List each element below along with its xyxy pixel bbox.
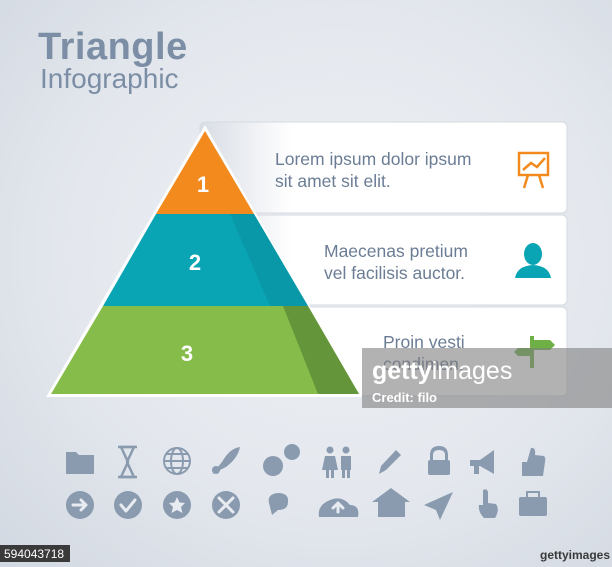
subtitle: Infographic: [40, 63, 179, 94]
watermark box: Credit: filo: [372, 390, 437, 405]
image id label: 594043718: [4, 547, 64, 561]
icon: person: [515, 243, 551, 278]
tier 1: [156, 131, 254, 214]
panel: row 1: [200, 122, 567, 213]
panel: row 2: vel facilisis auctor.: [324, 263, 465, 283]
watermark box: gettyimages: [372, 357, 512, 385]
pyramid: [46, 125, 362, 397]
icon: signpost: [514, 336, 555, 368]
tier 3: [51, 306, 359, 394]
icon row 1: [66, 444, 545, 478]
tier 2: [103, 214, 308, 306]
text: row 3: Proin vesti: [383, 332, 465, 352]
pyramid: 2: [189, 250, 201, 275]
panel: row 3: [200, 307, 567, 396]
pyramid: 3: [181, 341, 193, 366]
panel: row 2: [200, 215, 567, 305]
panel: row 1: sit amet sit elit.: [275, 171, 391, 191]
icon: presentation chart: [519, 153, 548, 188]
star icon: [169, 497, 185, 513]
text: row 2: Maecenas pretium: [324, 241, 468, 261]
getty small logo: gettyimages: [540, 548, 610, 562]
icon row 2: [66, 488, 547, 520]
title: Triangle: [38, 26, 188, 68]
watermark box: [362, 348, 612, 408]
panel: row 3: condimen.: [383, 354, 464, 374]
numbers: 1: [197, 172, 209, 197]
text: row 1: Lorem ipsum dolor ipsum: [275, 149, 471, 169]
